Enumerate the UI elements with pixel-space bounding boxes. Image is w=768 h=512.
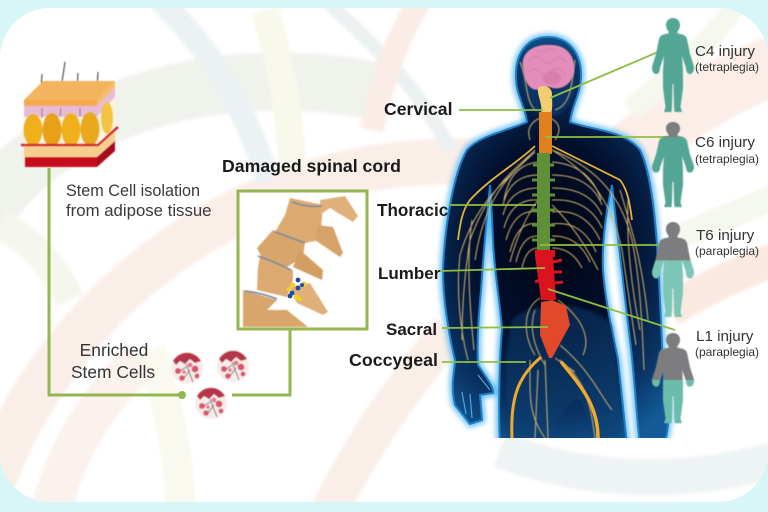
label: L1 injury: L1 injury [696,328,753,345]
label: lumber: Lumber [378,264,441,283]
sciatic nerves [512,358,598,438]
label: C6 injury: C6 injury [695,134,755,151]
figure: human body with nervous system [443,37,669,445]
panel: damaged vertebrae [238,191,367,329]
finger gaps [462,375,490,418]
leg and hip shading [506,306,622,438]
text: enriched stem cells: Enriched [80,340,148,360]
brainstem [538,86,552,114]
label: C6 injury: (tetraplegia) [695,152,759,166]
heading: damaged spinal cord: Damaged spinal cord [222,156,401,176]
label: thoracic: Thoracic [377,201,448,220]
brain [523,45,574,90]
connector dot [178,391,186,399]
label: C4 injury: C4 injury [695,43,755,60]
illustration: vertebrae [243,196,358,327]
text: enriched stem cells: Stem Cells [71,362,155,382]
icon: skin and adipose tissue block [21,62,118,167]
green connector: cells to spine [232,330,290,395]
body silhouette [443,37,669,445]
text: stem cell isolation: Stem Cell isolation [66,182,200,200]
body outer glow [443,37,669,445]
icon: stem cell cluster [171,350,249,419]
figure: C6 injury person [652,122,694,207]
label: L1 injury: (paraplegia) [695,345,759,359]
figure: L1 injury person [652,333,694,423]
label: coccygeal: Coccygeal [349,350,438,370]
stem cells on the vertebra [287,278,306,301]
spine cervical segment [539,112,552,154]
ribs and nerves [458,60,648,438]
pointer lines [440,52,675,362]
head dark interior [524,81,574,118]
label: T6 injury: (paraplegia) [695,244,759,258]
green connector: skin to enriched cells [49,168,182,395]
spine sacral segment [540,300,570,358]
label: C4 injury: (tetraplegia) [695,60,759,74]
text: stem cell isolation: from adipose tissue [66,201,212,220]
label: cervical: Cervical [384,99,452,119]
label: T6 injury: T6 injury [696,227,754,244]
figure: C4 injury person [652,18,694,112]
label: sacral: Sacral [386,320,437,339]
figure: T6 injury person [652,222,694,317]
spine lumbar segment [535,250,563,300]
spine thoracic segment [532,153,555,250]
